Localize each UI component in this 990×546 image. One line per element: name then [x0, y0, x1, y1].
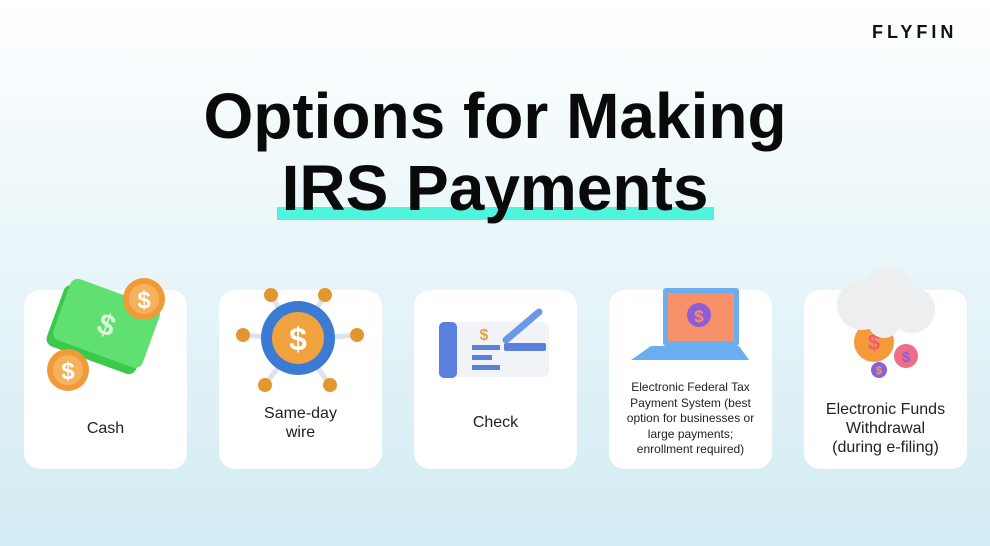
- label: Withdrawal: [846, 420, 925, 437]
- card: EFTPS: [609, 290, 772, 469]
- icon: laptop: $: [694, 307, 704, 326]
- icon: laptop: [631, 288, 749, 360]
- icon: cloud coins: $: [868, 330, 880, 355]
- label: [264, 405, 337, 441]
- title: [203, 80, 787, 224]
- label: Same-day: [264, 405, 337, 422]
- icon: cash: $: [137, 287, 151, 314]
- label: Electronic Federal Tax: [631, 380, 750, 394]
- icon: cloud coins: $: [902, 349, 911, 366]
- icon: check: [439, 308, 549, 378]
- label: [826, 401, 945, 456]
- card: cash: [24, 290, 187, 469]
- label: Electronic Funds: [826, 401, 945, 418]
- label: Payment System (best: [630, 396, 751, 410]
- label: Check: [473, 414, 518, 431]
- label: [627, 380, 754, 456]
- card: EFW: [804, 290, 967, 469]
- label: (during e-filing): [832, 439, 939, 456]
- icon: cash: $: [61, 358, 75, 385]
- icon: cash: $: [93, 307, 120, 344]
- icon: cloud coins: [837, 267, 935, 378]
- label: enrollment required): [637, 442, 744, 456]
- label: option for businesses or: [627, 411, 754, 425]
- icon: cash: [46, 278, 165, 391]
- icon: wire: $: [289, 321, 307, 357]
- card: wire: [219, 290, 382, 469]
- card: check: [414, 290, 577, 469]
- label: Cash: [87, 420, 124, 437]
- icon: check: $: [480, 327, 489, 344]
- logo: FLYFIN: [872, 22, 957, 42]
- label: large payments;: [648, 426, 733, 440]
- title: Options for Making: [203, 80, 787, 152]
- icon: wire: [236, 288, 364, 392]
- label: wire: [286, 424, 315, 441]
- title highlight: [277, 207, 714, 220]
- title: IRS Payments: [282, 152, 708, 224]
- icon: cloud coins: $: [876, 365, 882, 377]
